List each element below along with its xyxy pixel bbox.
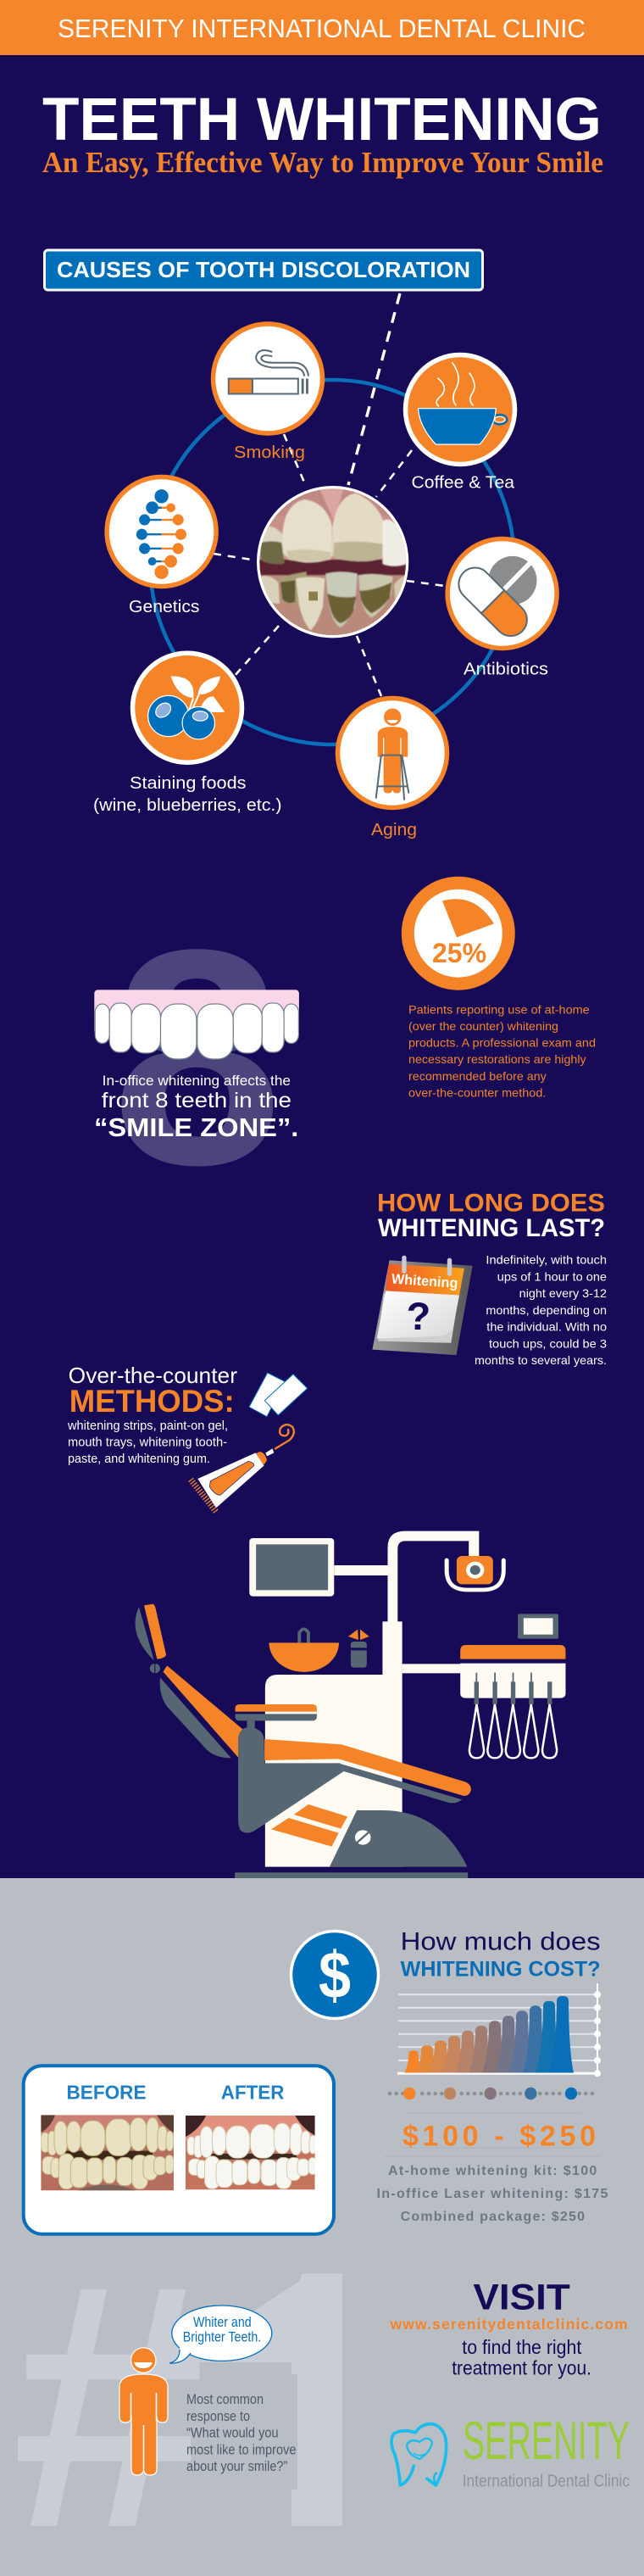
cause: antibiotics: Antibiotics <box>464 660 548 678</box>
cause: aging <box>337 699 447 839</box>
chart: 25 percent dial <box>408 883 508 984</box>
whitening duration text: ups of 1 hour to one <box>497 1270 607 1284</box>
subtitle: An Easy, Effective Way to Improve Your Smile <box>42 146 603 179</box>
heading: how long does whitening last: HOW LONG DOES <box>377 1189 605 1218</box>
whitening duration text: touch ups, could be 3 <box>489 1336 607 1350</box>
methods list text: mouth trays, whitening tooth- <box>68 1436 227 1450</box>
visit call to action: treatment for you. <box>452 2357 591 2379</box>
stained teeth photo <box>257 486 408 638</box>
smile zone caption: “SMILE ZONE”. <box>94 1112 298 1142</box>
icon: dollar sign: $ <box>319 1938 351 2012</box>
methods list text: whitening strips, paint-on gel, <box>67 1419 228 1433</box>
icon: tooth with heart <box>391 2424 447 2485</box>
heading: causes of tooth discoloration: CAUSES OF TOOTH DISCOLORATION <box>57 257 470 282</box>
icon: whitening strips and toothpaste tube <box>191 1373 308 1512</box>
smile zone panel <box>94 885 299 1229</box>
price range <box>384 2113 600 2156</box>
at-home usage text: over-the-counter method. <box>408 1086 546 1100</box>
before photo <box>41 2115 174 2190</box>
price range: $100 - $250 <box>402 2121 596 2153</box>
heading: causes of tooth discoloration <box>44 250 483 290</box>
whitening duration text: night every 3-12 <box>519 1286 607 1300</box>
heading: how much does whitening cost: WHITENING COST? <box>401 1958 601 1982</box>
cause: staining foods <box>93 653 281 815</box>
figure: smiling person <box>119 2348 168 2475</box>
after photo <box>186 2116 317 2189</box>
at-home usage text: necessary restorations are highly <box>408 1052 586 1066</box>
cause: genetics: Genetics <box>129 598 200 616</box>
methods list text: paste, and whitening gum. <box>68 1452 210 1466</box>
at-home usage text: Patients reporting use of at-home <box>408 1003 590 1017</box>
whitening duration text: Indefinitely, with touch <box>486 1253 607 1267</box>
methods list text <box>67 1419 228 1466</box>
icon: DNA strand <box>136 489 186 579</box>
at-home usage text: products. A professional exam and <box>408 1036 596 1050</box>
icon: upper teeth <box>94 990 299 1059</box>
cause: smoking: Smoking <box>234 443 305 462</box>
at-home usage text <box>408 1003 596 1100</box>
before and after photos <box>41 2115 317 2190</box>
visit call to action: VISIT <box>473 2277 570 2317</box>
whitening duration text <box>475 1253 607 1367</box>
causes diagram ring <box>150 380 514 744</box>
icon: dollar sign <box>291 1932 378 2018</box>
header band: SERENITY INTERNATIONAL DENTAL CLINIC <box>58 14 586 43</box>
at-home usage text: (over the counter) whitening <box>408 1019 558 1033</box>
cause: aging: Aging <box>371 821 417 839</box>
smile zone caption: In-office whitening affects the <box>103 1073 291 1089</box>
dashed connector lines <box>214 293 445 696</box>
survey response text: most like to improve <box>186 2441 297 2457</box>
illustration: dental chair <box>136 1531 565 1878</box>
cause: coffee and tea <box>405 354 515 492</box>
icon: calendar <box>372 1257 473 1355</box>
speech bubble: Brighter Teeth. <box>183 2329 261 2345</box>
smile zone caption: front 8 teeth in the <box>102 1089 291 1112</box>
cause: antibiotics <box>447 539 557 678</box>
cause: staining foods: (wine, blueberries, etc.) <box>93 796 281 815</box>
panel: before and after: BEFORE <box>66 2082 146 2104</box>
cause: genetics <box>107 477 216 616</box>
price scale dots <box>388 2088 594 2099</box>
heading: over-the-counter methods: Over-the-counter <box>69 1363 237 1388</box>
at-home usage text: recommended before any <box>408 1069 547 1083</box>
ghost number one rank <box>18 2273 342 2526</box>
panel: before and after: AFTER <box>221 2082 285 2104</box>
survey response text: about your smile?” <box>186 2458 288 2474</box>
cause: coffee and tea: Coffee & Tea <box>412 473 515 492</box>
panel: before and after <box>24 2066 334 2234</box>
price list <box>376 2164 608 2224</box>
cause: smoking <box>214 324 322 462</box>
over-the-counter panel <box>67 1363 308 1512</box>
visit call to action <box>390 2277 628 2379</box>
icon: person with walker <box>376 709 408 800</box>
survey response text: response to <box>186 2408 250 2424</box>
chart: 25 percent dial: 25% <box>432 938 486 968</box>
icon: blueberries <box>148 677 225 739</box>
heading: how long does whitening last: WHITENING LAST? <box>378 1214 605 1242</box>
header band <box>0 0 644 55</box>
grey lower background panel <box>0 1878 644 2576</box>
icon: calendar: ? <box>407 1295 430 1338</box>
title: TEETH WHITENING <box>42 86 602 153</box>
cause: staining foods: Staining foods <box>130 774 246 793</box>
heading: over-the-counter methods: METHODS: <box>69 1384 235 1419</box>
chart: rising cost bars <box>397 1983 601 2077</box>
logo: serenity dental clinic <box>391 2412 630 2490</box>
survey response text <box>186 2391 297 2474</box>
price list: In-office Laser whitening: $175 <box>376 2187 608 2201</box>
how long panel <box>372 1189 607 1367</box>
whitening duration text: the individual. With no <box>486 1319 607 1333</box>
smile zone caption <box>94 1073 298 1142</box>
visit call to action: www.serenitydentalclinic.com <box>390 2316 628 2333</box>
25 percent panel <box>408 883 596 1100</box>
icon: coffee cup <box>418 362 507 444</box>
navy background panel <box>0 0 644 1878</box>
whitening duration text: months to several years. <box>475 1353 607 1367</box>
heading: how much does whitening cost: How much does <box>401 1927 601 1955</box>
speech bubble <box>169 2306 272 2363</box>
icon: pills <box>452 556 536 643</box>
heading: how much does whitening cost <box>401 1927 601 1982</box>
price list: At-home whitening kit: $100 <box>388 2164 597 2178</box>
price list: Combined package: $250 <box>401 2210 585 2224</box>
speech bubble: Whiter and <box>193 2314 252 2330</box>
icon: calendar: Whitening <box>391 1271 458 1291</box>
icon: cigarette <box>229 350 308 393</box>
ghost number 8: 8 <box>112 885 282 1229</box>
visit call to action: to find the right <box>462 2336 582 2358</box>
heading: how long does whitening last <box>377 1189 605 1242</box>
survey response text: Most common <box>186 2391 264 2407</box>
survey response text: “What would you <box>186 2424 279 2440</box>
heading: over-the-counter methods <box>69 1363 237 1419</box>
whitening duration text: months, depending on <box>486 1303 607 1317</box>
